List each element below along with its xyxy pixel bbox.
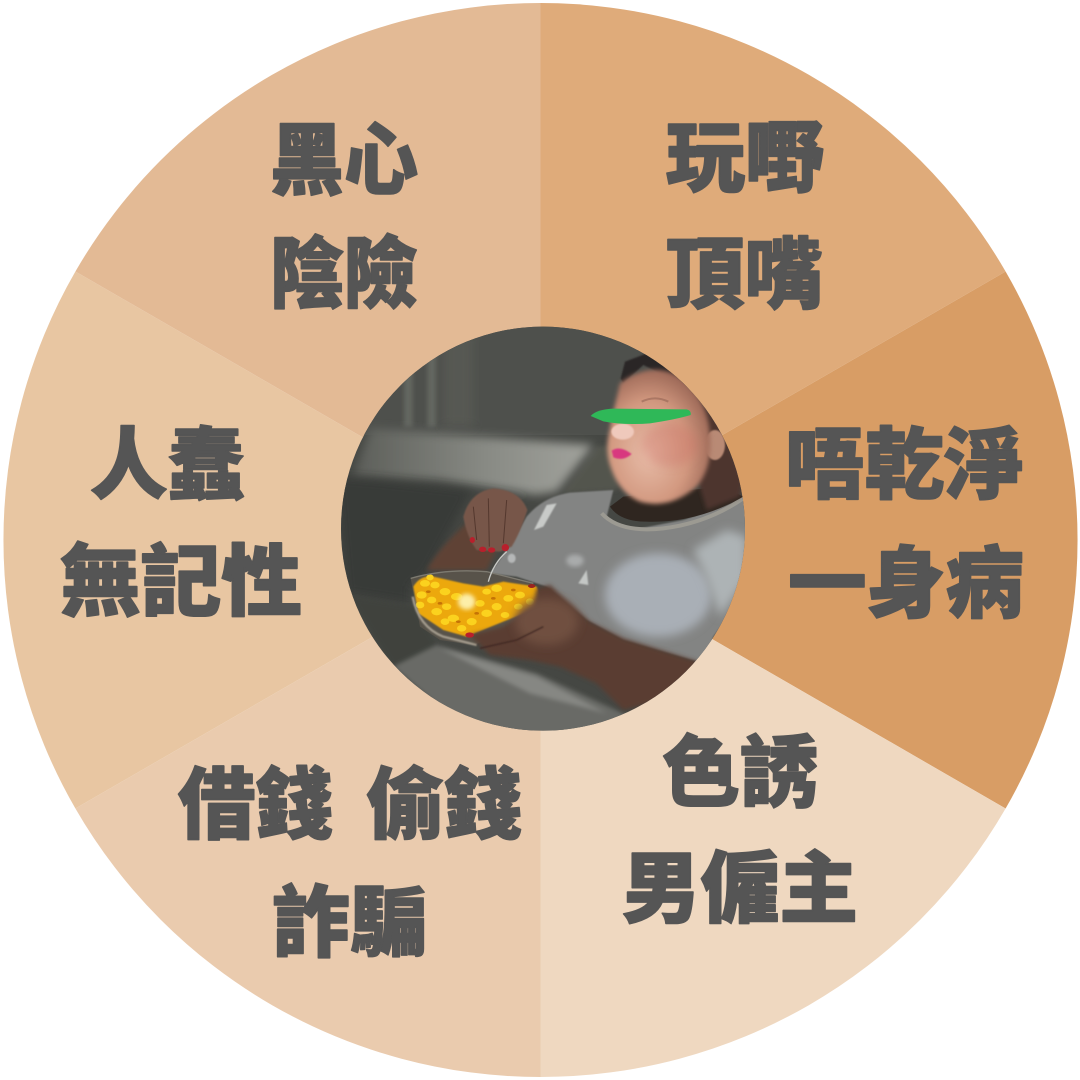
- label: bottom right: [622, 729, 858, 933]
- right arm and hand: [465, 584, 703, 710]
- label: left: 無記性: [60, 538, 302, 626]
- label: bottom right: 色誘: [662, 729, 818, 817]
- segment: right: [540, 272, 1078, 808]
- segment: left: [3, 272, 540, 808]
- popcorn bowl: [411, 552, 547, 645]
- segment: bottom left: [75, 540, 541, 1077]
- label: bottom left: [178, 761, 522, 967]
- label: top right: 玩嘢: [666, 114, 824, 202]
- segment: top right: [540, 3, 1006, 540]
- hair and ear: [621, 353, 743, 510]
- center photo: woman eating popcorn on sofa: [341, 326, 745, 731]
- green eye bar: [591, 409, 691, 424]
- label: left: [60, 421, 302, 626]
- label: right: 唔乾淨: [785, 421, 1024, 509]
- label: left: 人蠢: [90, 421, 245, 509]
- label: right: 一身病: [788, 540, 1024, 628]
- label: top left: 陰險: [270, 230, 418, 318]
- sofa and wall backdrop: [330, 320, 663, 667]
- neck: [610, 487, 743, 522]
- label: top left: [270, 117, 418, 318]
- label: bottom left: 偷錢: [366, 761, 522, 849]
- label: bottom left: 詐騙: [272, 879, 428, 967]
- face: [607, 370, 711, 504]
- label: top right: [666, 114, 824, 319]
- label: right: [785, 421, 1024, 628]
- label: bottom left: 借錢: [178, 761, 333, 849]
- label: bottom right: 男僱主: [622, 845, 858, 933]
- segment: bottom right: [540, 540, 1006, 1077]
- left arm and hand: [427, 488, 527, 570]
- shirt: [490, 490, 750, 663]
- lips: [612, 448, 632, 459]
- skirt: [394, 644, 626, 731]
- label: top left: 黑心: [270, 117, 418, 205]
- segment: top left: [75, 3, 541, 540]
- label: top right: 頂嘴: [666, 231, 823, 319]
